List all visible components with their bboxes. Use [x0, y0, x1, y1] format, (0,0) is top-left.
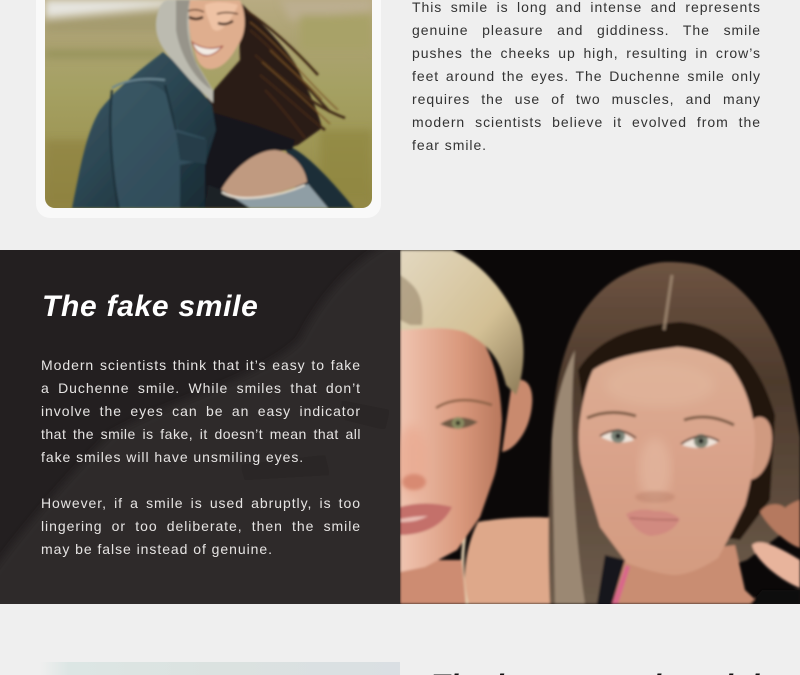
girl eyebrows — [587, 412, 636, 418]
girl face — [579, 347, 755, 575]
woman lips — [400, 504, 452, 535]
girl lips — [626, 510, 680, 536]
text block: Duchenne smile description — [412, 0, 761, 153]
text block: Duchenne smile description: pushes the cheeks up high, resulting in crow’s — [412, 45, 761, 61]
text block: Duchenne smile description: modern scientists believe it evolved from the — [412, 114, 761, 130]
body text: lingering or too deliberate, then the smile — [41, 518, 361, 534]
face — [189, 0, 245, 69]
woman ear — [502, 380, 532, 452]
girl ear — [748, 417, 772, 480]
denim jacket — [72, 52, 216, 208]
hand and fingers — [760, 500, 800, 548]
smile — [192, 42, 223, 56]
body text: may be false instead of genuine. — [41, 541, 273, 557]
woman hair — [400, 250, 523, 395]
bare knee — [221, 150, 307, 200]
text block: Duchenne smile description: requires the use of two muscles, and many — [412, 91, 761, 107]
girl eyes — [601, 432, 634, 442]
woman eye — [440, 417, 478, 429]
heading: The fake smile — [42, 290, 259, 323]
body text: However, if a smile is used abruptly, is too — [41, 495, 361, 511]
body text: a Duchenne smile. While smiles that don’t — [41, 380, 361, 396]
woman neck and face — [400, 560, 466, 604]
body text: involve the eyes can be an easy indicator — [41, 403, 361, 419]
text block: Duchenne smile description: feet around the eyes. The Duchenne smile only — [412, 68, 761, 84]
text block: Duchenne smile description: fear smile. — [412, 137, 487, 153]
eyes — [189, 17, 203, 19]
hood — [156, 0, 213, 103]
photo: woman in field — [45, 0, 372, 208]
ghosted background photo — [0, 250, 400, 604]
panel: the fake smile — [0, 250, 400, 604]
body text: fake smiles will have unsmiling eyes. — [41, 449, 304, 465]
woman shoulder — [464, 517, 570, 604]
girl neck — [612, 545, 760, 604]
girl nose — [639, 438, 671, 502]
girl hair — [549, 262, 800, 604]
girl black top and strap — [597, 555, 625, 604]
photo: next section image, cropped at the page edge — [52, 662, 400, 675]
body text: that the smile is fake, it doesn’t mean that all — [41, 426, 361, 442]
photo: two faces with fake smiles — [400, 250, 800, 604]
text block: Duchenne smile description: genuine pleasure and giddiness. The smile — [412, 22, 761, 38]
dark leg — [285, 145, 354, 208]
hair — [206, 4, 322, 148]
photo card: smiling woman in denim jacket — [36, 0, 381, 218]
woman nose — [396, 426, 428, 494]
body text — [41, 357, 361, 557]
body text: Modern scientists think that it’s easy to fake — [41, 357, 361, 373]
dark shirt — [200, 110, 295, 208]
